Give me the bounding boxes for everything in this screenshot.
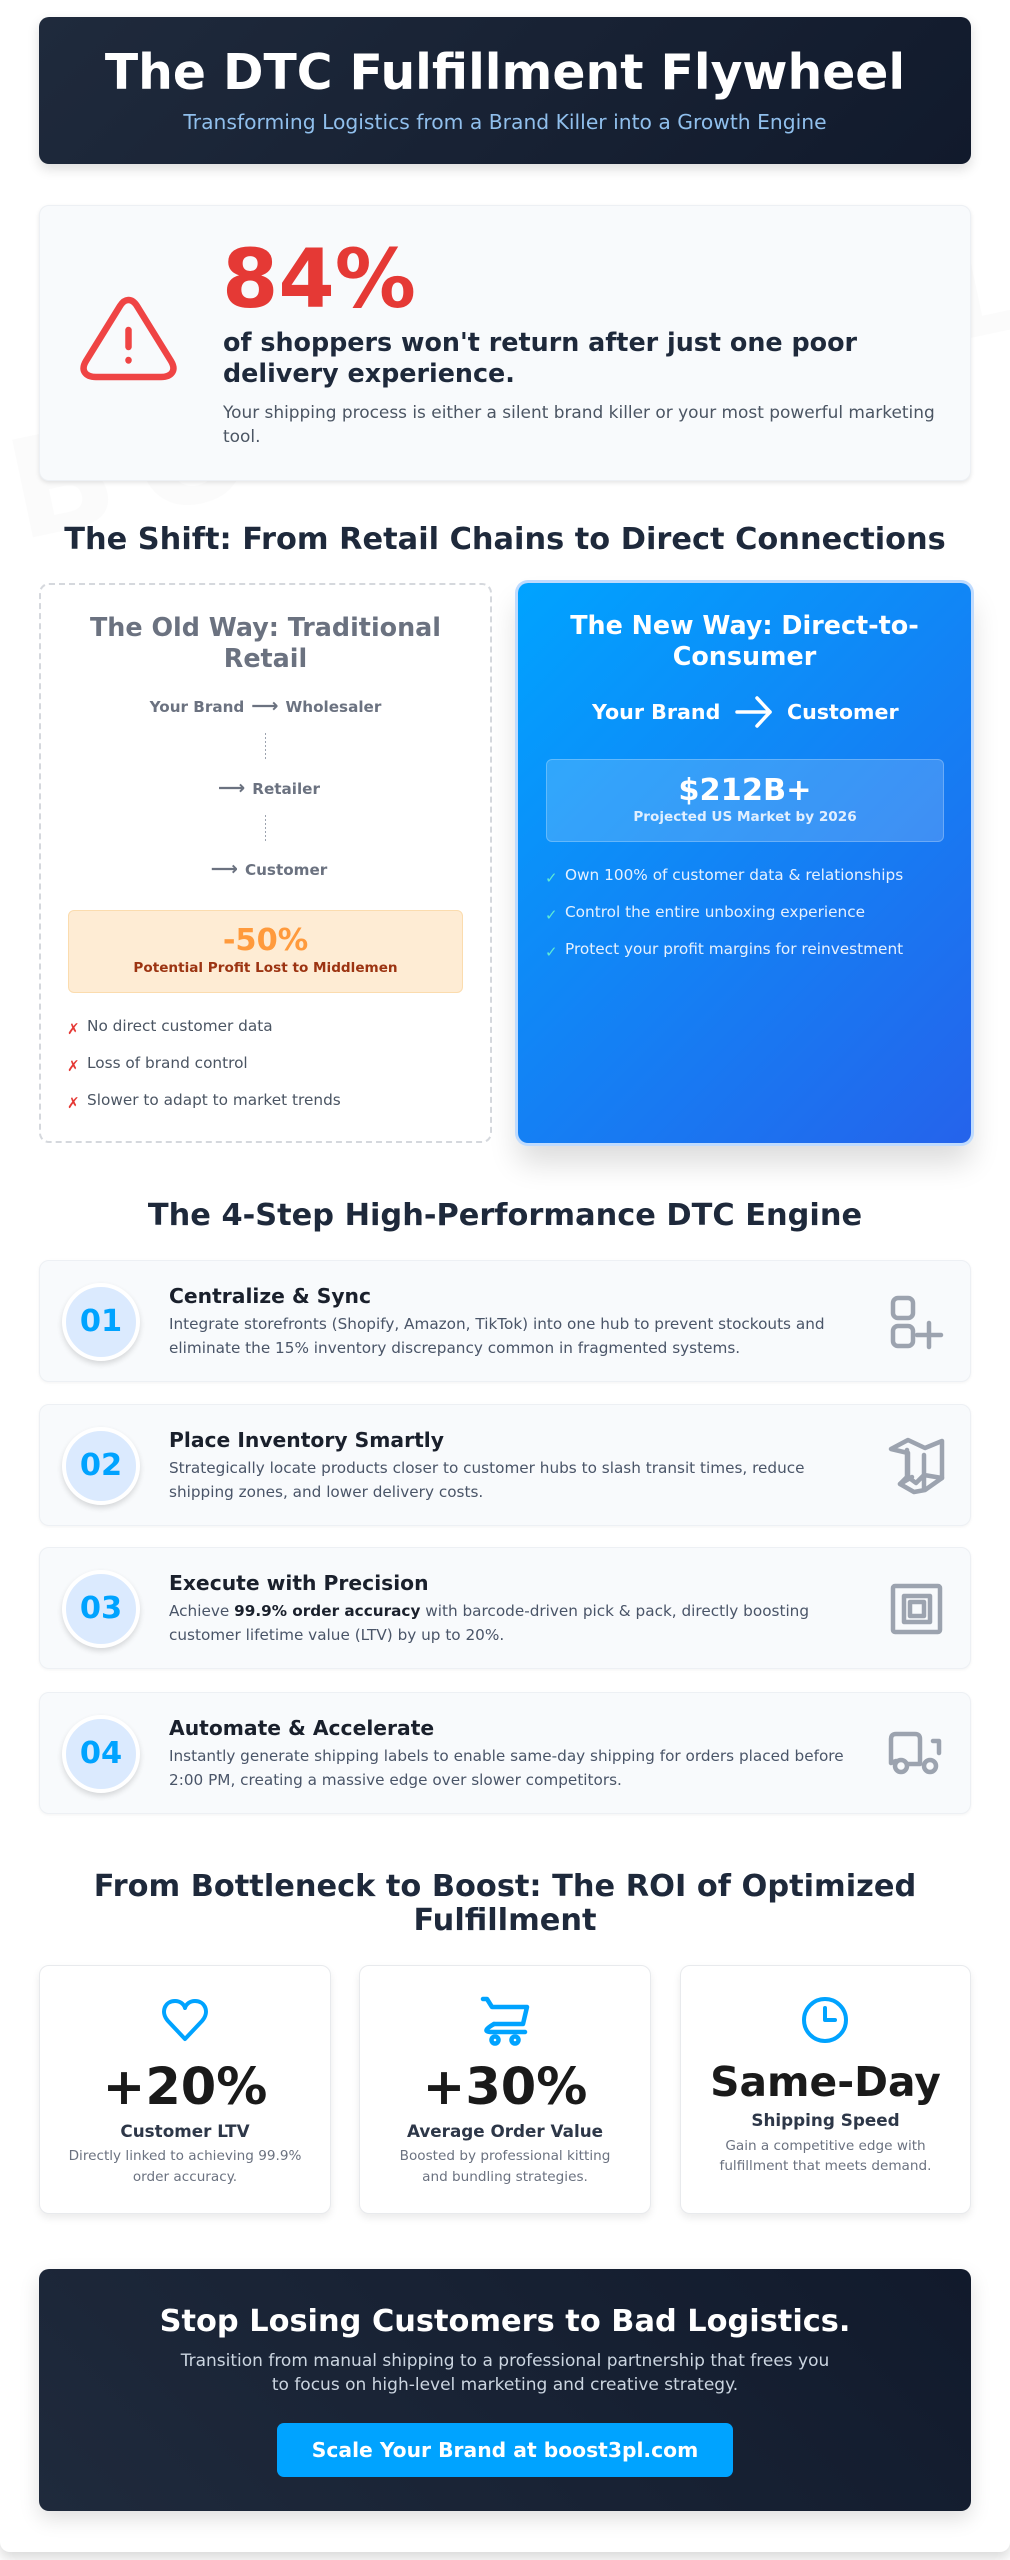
description: and bundling strategies.: [422, 2168, 588, 2184]
flow diagram: ⟶ Customer: [211, 858, 327, 880]
step description: Integrate storefronts (Shopify, Amazon, TikTok) into one hub to prevent stockouts and: [169, 1315, 825, 1333]
caption: Projected US Market by 2026: [633, 809, 857, 825]
icon: delivery truck: [888, 1732, 942, 1774]
supporting text: tool.: [223, 426, 260, 446]
value: -50%: [223, 923, 308, 958]
label: Average Order Value: [407, 2121, 603, 2141]
KPI card: average order value: [359, 1965, 651, 2214]
callout: market size: [546, 759, 944, 842]
CTA button: [277, 2423, 733, 2477]
icon: map and box: [888, 1438, 944, 1494]
direct flow: [592, 696, 899, 728]
heading: ROI: [94, 1869, 916, 1938]
step description: Strategically locate products closer to customer hubs to slash transit times, reduce: [169, 1459, 805, 1477]
flow diagram: [150, 695, 382, 880]
step description: customer lifetime value (LTV) by up to 20%.: [169, 1626, 504, 1644]
step description: 2:00 PM, creating a massive edge over slower competitors.: [169, 1771, 622, 1789]
big number: 84%: [222, 233, 416, 327]
value: $212B+: [678, 773, 812, 808]
description: fulfillment that meets demand.: [720, 2158, 931, 2174]
list: drawbacks: [67, 1017, 341, 1112]
icon: apps: [890, 1296, 944, 1350]
list: drawbacks: ✗: [67, 1094, 80, 1112]
description: order accuracy.: [133, 2168, 237, 2184]
number badge: [62, 1283, 140, 1361]
number badge: 01: [80, 1304, 122, 1339]
callout: -50% profit: [68, 910, 463, 993]
list: benefits: Protect your profit margins for reinvestment: [565, 940, 903, 958]
panel: old way: [39, 583, 492, 1143]
panel: call to action: [39, 2269, 971, 2511]
old way title: Retail: [224, 643, 307, 673]
flow diagram: Your Brand ⟶ Wholesaler: [150, 695, 381, 717]
label: Customer LTV: [120, 2121, 250, 2141]
supporting text: Your shipping process is either a silent brand killer or your most powerful marketing: [223, 402, 935, 422]
list: drawbacks: No direct customer data: [87, 1017, 273, 1035]
step description: Achieve 99.9% order accuracy with barcode-driven pick & pack, directly boosting: [169, 1602, 809, 1620]
number badge: 03: [80, 1591, 122, 1626]
step 1: [39, 1260, 971, 1382]
list: benefits: ✓: [545, 906, 558, 924]
panel: new way: [518, 583, 971, 1143]
step title: Place Inventory Smartly: [169, 1428, 444, 1452]
value: +30%: [423, 2058, 587, 2117]
icon: warning triangle: [80, 296, 177, 380]
list: benefits: [545, 866, 903, 961]
step description: [169, 1747, 844, 1789]
list: benefits: Own 100% of customer data & relationships: [565, 866, 903, 884]
headline: [223, 327, 857, 388]
new way title: The New Way: Direct-to-: [570, 610, 919, 640]
step title: Execute with Precision: [169, 1571, 429, 1595]
step description: shipping zones, and lower delivery costs.: [169, 1483, 483, 1501]
step title: Centralize & Sync: [169, 1284, 371, 1308]
panel: 84% statistic: [39, 205, 971, 481]
label: Shipping Speed: [751, 2110, 900, 2130]
new way title: Consumer: [673, 640, 816, 670]
list: drawbacks: Loss of brand control: [87, 1054, 248, 1072]
KPI card: shipping speed: [680, 1965, 971, 2214]
title: The DTC Fulfillment Flywheel: [105, 44, 905, 101]
old way title: The Old Way: Traditional: [90, 612, 441, 642]
CTA text: Transition from manual shipping to a professional partnership that frees you: [181, 2351, 829, 2371]
step description: [169, 1315, 825, 1357]
heading: ROI: From Bottleneck to Boost: The ROI of Optimized: [94, 1869, 916, 1904]
number badge: [62, 1570, 140, 1648]
headline: of shoppers won't return after just one poor: [223, 327, 857, 357]
step 3: [39, 1547, 971, 1669]
step description: [169, 1459, 805, 1501]
headline: delivery experience.: [223, 358, 515, 388]
icon: clock: [802, 1997, 848, 2043]
CTA headline: Stop Losing Customers to Bad Logistics.: [160, 2304, 850, 2339]
subtitle: Transforming Logistics from a Brand Killer into a Growth Engine: [183, 110, 827, 134]
direct flow: Your Brand: [592, 700, 720, 724]
step 2: [39, 1404, 971, 1526]
description: [69, 2148, 301, 2184]
CTA text: [180, 2351, 829, 2395]
number badge: 02: [80, 1448, 122, 1483]
step description: Instantly generate shipping labels to enable same-day shipping for orders placed before: [169, 1747, 844, 1765]
description: Boosted by professional kitting: [400, 2148, 610, 2164]
list: drawbacks: ✗: [67, 1020, 80, 1038]
flow diagram: ⟶ Retailer: [218, 777, 320, 799]
list: benefits: Control the entire unboxing experience: [565, 903, 865, 921]
supporting text: [223, 402, 935, 446]
caption: Potential Profit Lost to Middlemen: [133, 960, 398, 976]
value: Same-Day: [710, 2058, 941, 2106]
description: [400, 2148, 610, 2184]
KPI card: customer LTV: [39, 1965, 331, 2214]
CTA button: Scale Your Brand at boost3pl.com: [312, 2438, 698, 2462]
header banner: [39, 17, 971, 164]
description: [720, 2138, 931, 2174]
list: benefits: ✓: [545, 869, 558, 887]
icon: scan frame: [890, 1584, 942, 1634]
list: benefits: ✓: [545, 943, 558, 961]
step description: [169, 1602, 809, 1644]
step 4: [39, 1692, 971, 1814]
number badge: [62, 1715, 140, 1793]
heading: 4-step engine: The 4-Step High-Performance DTC Engine: [148, 1198, 862, 1233]
new way title: [570, 610, 919, 670]
direct flow: Customer: [787, 700, 899, 724]
CTA text: to focus on high-level marketing and creative strategy.: [272, 2375, 738, 2395]
step title: Automate & Accelerate: [169, 1716, 434, 1740]
list: drawbacks: Slower to adapt to market trends: [87, 1091, 341, 1109]
number badge: [62, 1427, 140, 1505]
icon: heart: [162, 1999, 208, 2042]
heading: ROI: Fulfillment: [413, 1902, 597, 1938]
heading: the shift: The Shift: From Retail Chains to Direct Connections: [64, 522, 946, 557]
old way title: [90, 612, 441, 673]
icon: cart: [480, 1996, 530, 2046]
list: drawbacks: ✗: [67, 1057, 80, 1075]
number badge: 04: [80, 1736, 122, 1771]
description: Directly linked to achieving 99.9%: [69, 2148, 301, 2164]
description: Gain a competitive edge with: [725, 2138, 926, 2154]
value: +20%: [103, 2058, 267, 2117]
step description: eliminate the 15% inventory discrepancy common in fragmented systems.: [169, 1339, 740, 1357]
